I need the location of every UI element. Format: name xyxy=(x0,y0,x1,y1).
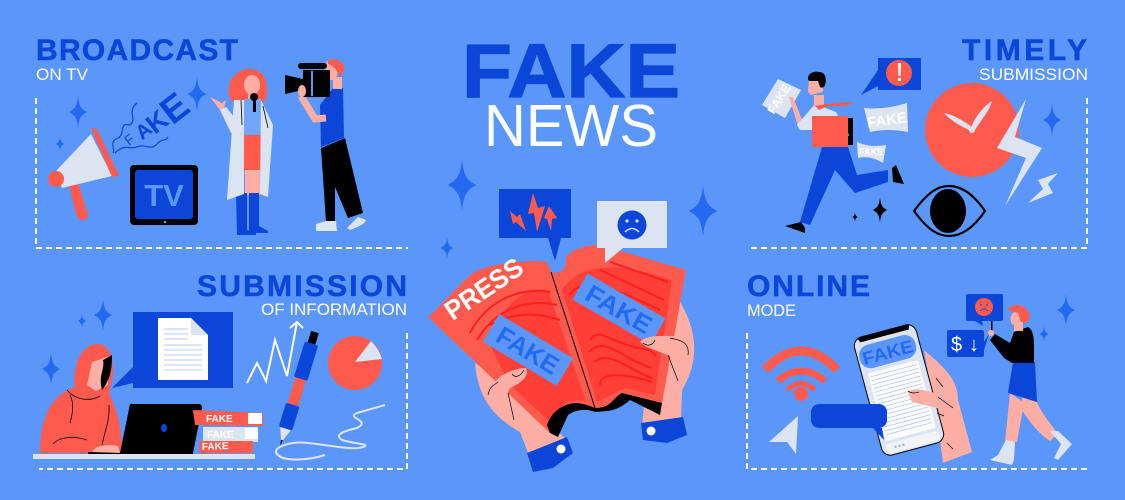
zigzag arrow xyxy=(247,322,303,383)
fake notes: FAKE xyxy=(859,147,883,157)
icon: clock xyxy=(925,83,1019,177)
pie chart xyxy=(328,336,382,390)
phone xyxy=(852,323,946,457)
panel: broadcast on TV xyxy=(36,34,408,248)
thumb on phone xyxy=(908,378,953,449)
icon: cursor xyxy=(769,416,798,454)
press headline: PRESS xyxy=(439,252,529,326)
stack of fake books xyxy=(193,410,263,453)
title xyxy=(462,29,680,159)
stack of fake books: FAKE xyxy=(206,414,233,425)
sparkles xyxy=(42,299,112,385)
thumbs and cuffs xyxy=(488,336,690,472)
newspaper xyxy=(428,245,686,437)
fake label left xyxy=(483,314,573,386)
speech bubble: sad face xyxy=(597,201,667,263)
chat bubble xyxy=(811,404,887,440)
stack of fake books: FAKE xyxy=(202,441,229,453)
subheading: submission: SUBMISSION xyxy=(979,66,1088,84)
heading: timely: TIMELY xyxy=(962,34,1087,67)
sign: dollar down: $↓ xyxy=(951,334,979,356)
sparkles xyxy=(852,104,1061,223)
heading: submission: SUBMISSION xyxy=(197,270,407,303)
icon: tv: TV xyxy=(144,178,184,213)
wavy fake text: A xyxy=(132,118,156,144)
panel: center newspaper illustration xyxy=(428,159,717,472)
subheading: of information: OF INFORMATION xyxy=(261,301,407,319)
heading: online: ONLINE xyxy=(747,270,870,303)
sparkles xyxy=(441,159,717,259)
phone: FAKE xyxy=(860,336,916,369)
speech bubble: alert xyxy=(861,58,921,95)
sparkles xyxy=(56,77,206,151)
speech bubble: lightning xyxy=(499,189,571,261)
wavy fake text xyxy=(113,84,197,153)
icon: eye xyxy=(914,186,985,236)
icon: megaphone xyxy=(48,128,119,220)
fake notes: FAKE xyxy=(866,109,908,132)
fake label right: FAKE xyxy=(580,280,657,340)
sign: dollar down xyxy=(947,330,989,357)
icon: wifi xyxy=(765,351,837,401)
fake label right xyxy=(573,274,665,344)
fake notes xyxy=(857,103,908,163)
subheading: on tv: ON TV xyxy=(36,66,88,84)
subheading: mode: MODE xyxy=(747,302,796,320)
figure: woman with signs xyxy=(988,305,1072,465)
left hand xyxy=(475,363,568,458)
icon: tv xyxy=(130,165,198,225)
figure: running man: FAKE xyxy=(765,82,793,116)
heading: broadcast: BROADCAST xyxy=(36,34,238,67)
sparkles xyxy=(1040,294,1075,342)
wavy fake text: K xyxy=(140,104,174,140)
title: NEWS xyxy=(484,93,658,159)
icon: lightning bolts xyxy=(997,99,1058,206)
panel: timely submission xyxy=(750,34,1088,248)
figure: hooded hacker with laptop xyxy=(33,344,255,459)
wavy fake text: F xyxy=(121,130,138,148)
figure: running man xyxy=(762,72,904,233)
sign: sad face xyxy=(966,294,1003,326)
wavy fake text: E xyxy=(152,84,197,132)
squiggle xyxy=(276,405,385,460)
hand behind phone xyxy=(924,350,972,463)
figure: reporter xyxy=(210,69,273,235)
fake label left: FAKE xyxy=(491,321,564,380)
panel: online mode xyxy=(747,270,1087,469)
speech bubble with document xyxy=(112,312,233,388)
right hand xyxy=(642,302,694,427)
panel: submission of information xyxy=(33,270,407,469)
title: FAKE xyxy=(462,29,680,114)
icon: pen xyxy=(274,330,322,448)
figure: cameraman xyxy=(285,59,366,231)
stack of fake books: FAKE xyxy=(207,430,234,441)
